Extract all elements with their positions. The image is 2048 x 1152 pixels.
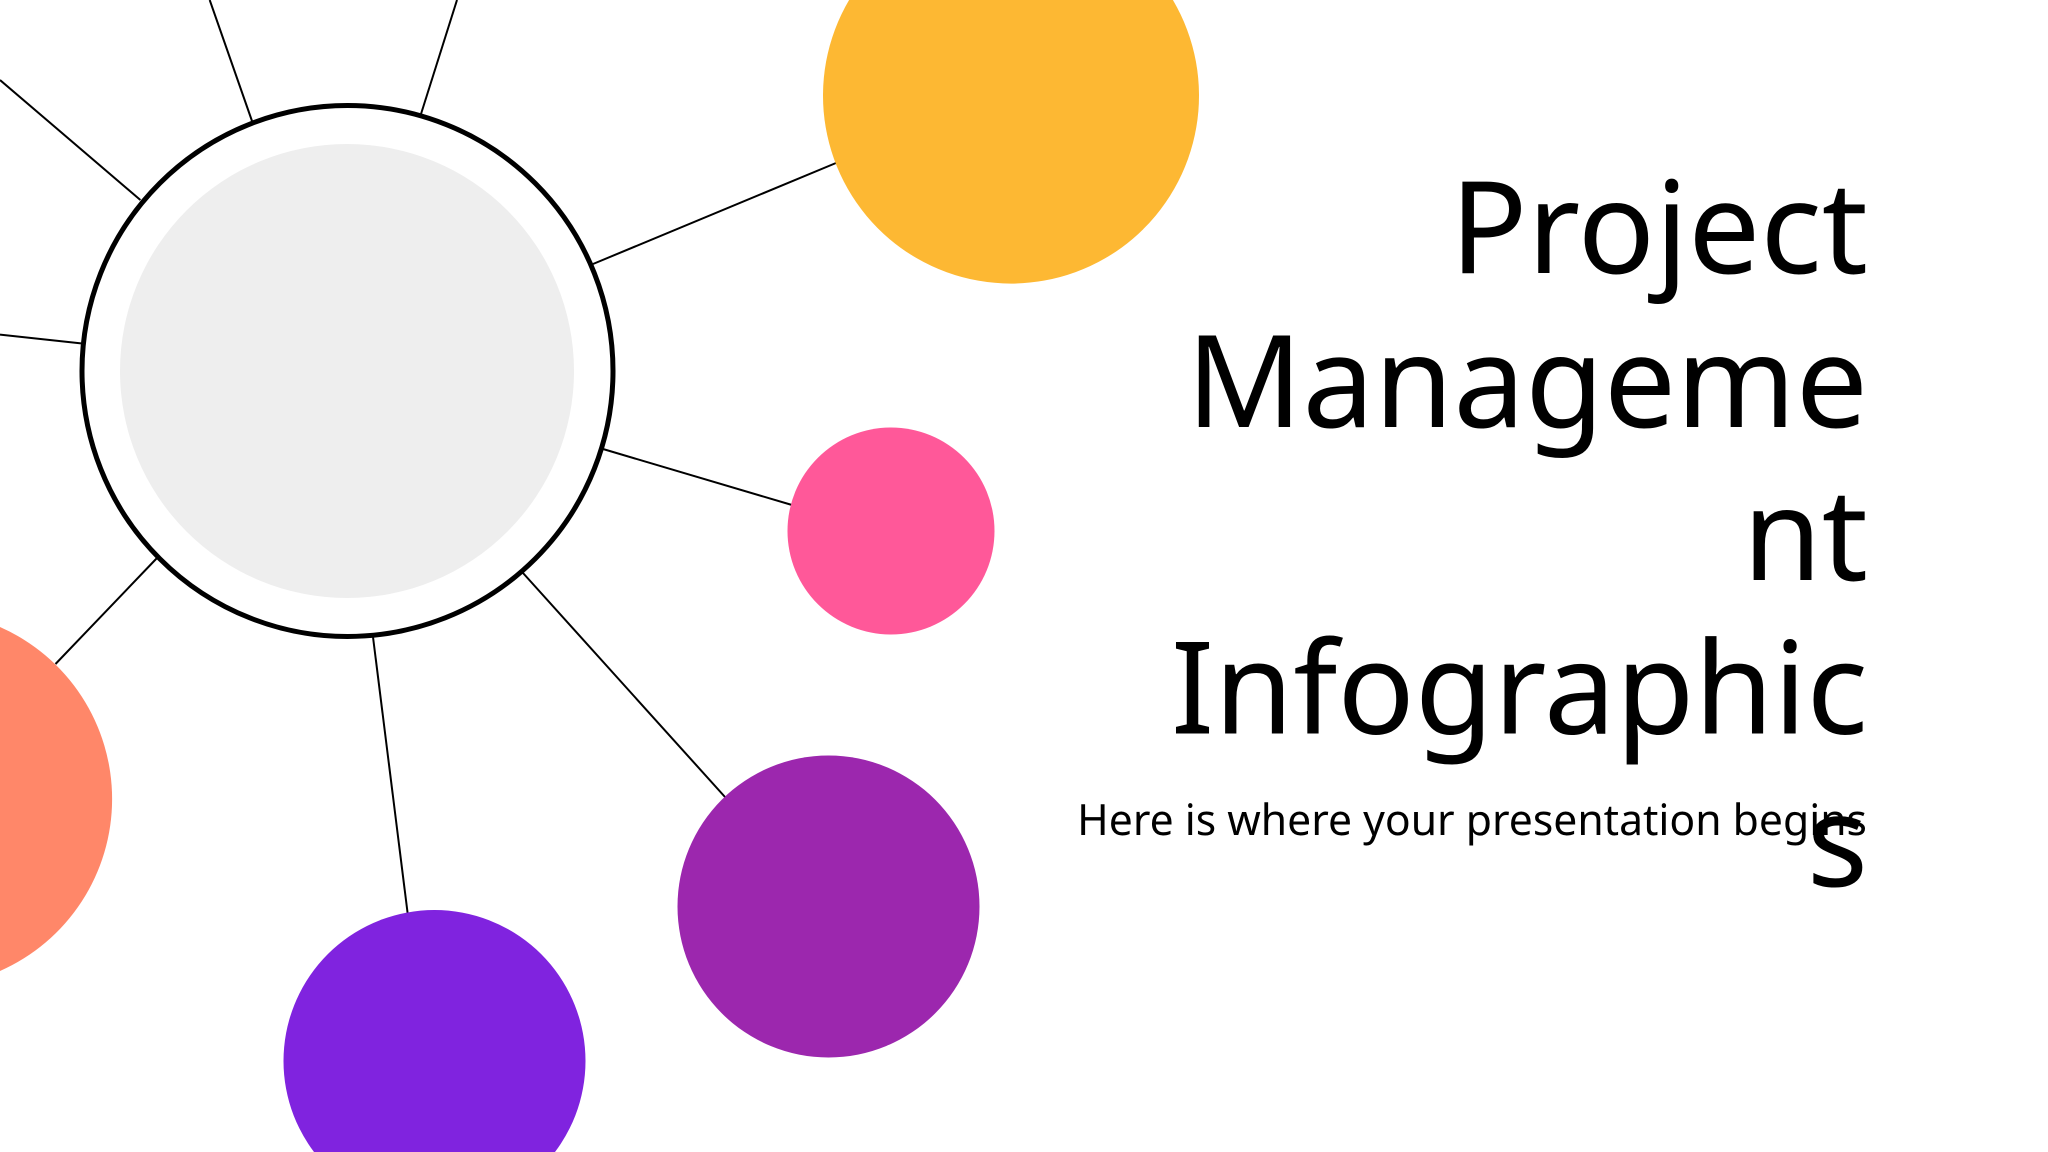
title: s — [1807, 749, 1868, 924]
node: magenta circle — [678, 756, 980, 1058]
subtitle: Here is where your presentation begins — [1077, 789, 1867, 848]
title: Infographic — [1171, 596, 1868, 772]
node: coral circle — [0, 627, 112, 971]
hub: outlined central circle — [82, 106, 613, 636]
title: Manageme — [1186, 290, 1868, 465]
title: Project — [1450, 136, 1868, 311]
node: violet circle — [283, 910, 586, 1152]
hub inner grey disc — [120, 144, 574, 598]
node: yellow circle — [823, 0, 1199, 284]
connector lines between hub and nodes — [0, 0, 836, 913]
title — [1171, 136, 1868, 924]
hub outer ring — [82, 106, 613, 636]
node: pink circle — [788, 428, 994, 634]
title: nt — [1743, 443, 1868, 618]
